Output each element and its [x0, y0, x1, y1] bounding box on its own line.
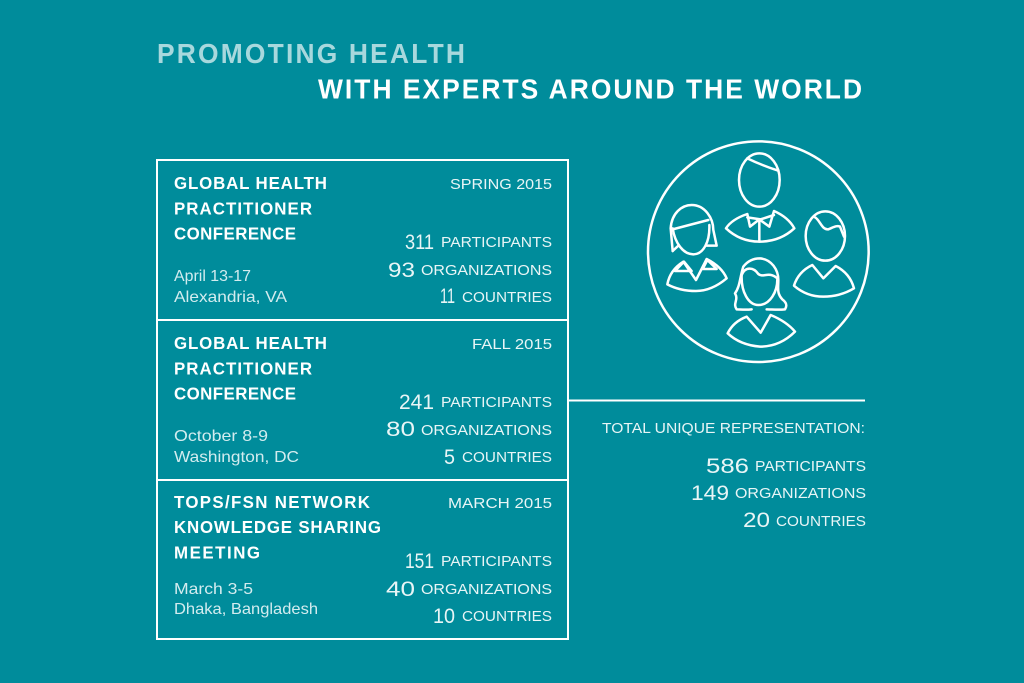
- panel: spring 2015 conference: ORGANIZATIONS: [421, 262, 552, 279]
- panel: march 2015 meeting: ORGANIZATIONS: [421, 581, 552, 598]
- panel: spring 2015 conference: PRACTITIONER: [174, 198, 313, 219]
- panel: march 2015 meeting: Dhaka, Bangladesh: [174, 601, 318, 618]
- panel: march 2015 meeting: TOPS/FSN NETWORK: [174, 492, 371, 512]
- panel: spring 2015 conference: [157, 160, 568, 320]
- panel: fall 2015 conference: ORGANIZATIONS: [421, 422, 552, 439]
- icon: man top: [726, 153, 794, 242]
- icon: woman bottom: [728, 258, 795, 347]
- panel: fall 2015 conference: Washington, DC: [174, 449, 299, 466]
- panel: spring 2015 conference: April 13-17: [174, 268, 251, 285]
- panel: march 2015 meeting: KNOWLEDGE SHARING: [174, 517, 381, 537]
- icon: group of people in circle: [648, 141, 869, 362]
- total unique representation stats: ORGANIZATIONS: [735, 485, 866, 502]
- panel: march 2015 meeting: MEETING: [174, 542, 260, 563]
- panel: fall 2015 conference: COUNTRIES: [462, 449, 552, 466]
- panel: spring 2015 conference: CONFERENCE: [174, 223, 296, 244]
- panel: fall 2015 conference: [157, 320, 568, 480]
- panel: spring 2015 conference: Alexandria, VA: [174, 289, 287, 306]
- panel: spring 2015 conference: 11: [440, 285, 455, 308]
- panel: march 2015 meeting: [157, 480, 568, 639]
- panel: fall 2015 conference: 241: [399, 391, 434, 414]
- panel: fall 2015 conference: CONFERENCE: [174, 383, 296, 404]
- panel: fall 2015 conference: PARTICIPANTS: [441, 394, 552, 411]
- title: PROMOTING HEALTH: [157, 39, 465, 69]
- panel: march 2015 meeting: 151: [405, 550, 434, 573]
- connector line: [568, 400, 865, 402]
- total unique representation stats: [602, 420, 866, 532]
- panel: spring 2015 conference: PARTICIPANTS: [441, 234, 552, 251]
- panel: spring 2015 conference: SPRING 2015: [450, 176, 552, 193]
- total unique representation stats: COUNTRIES: [776, 513, 866, 530]
- icon: man right: [794, 211, 854, 297]
- panel: fall 2015 conference: October 8-9: [174, 428, 268, 445]
- total unique representation stats: 20: [743, 509, 770, 532]
- panel: march 2015 meeting: March 3-5: [174, 581, 253, 598]
- panel: spring 2015 conference: GLOBAL HEALTH: [174, 173, 327, 193]
- panel: fall 2015 conference: 5: [444, 446, 455, 469]
- panel: spring 2015 conference: 311: [405, 231, 434, 254]
- total unique representation stats: 149: [691, 482, 729, 505]
- panel: march 2015 meeting: COUNTRIES: [462, 608, 552, 625]
- panel: spring 2015 conference: COUNTRIES: [462, 289, 552, 306]
- panel: fall 2015 conference: 80: [386, 418, 415, 441]
- panel: spring 2015 conference: 93: [388, 259, 415, 282]
- panel: march 2015 meeting: MARCH 2015: [448, 495, 552, 512]
- panel: fall 2015 conference: GLOBAL HEALTH: [174, 333, 327, 353]
- icon: woman left: [667, 205, 727, 291]
- panel: march 2015 meeting: 10: [433, 605, 455, 628]
- total unique representation stats: TOTAL UNIQUE REPRESENTATION:: [602, 420, 865, 437]
- panel: march 2015 meeting: 40: [386, 578, 415, 601]
- title: [157, 39, 862, 105]
- title: WITH EXPERTS AROUND THE WORLD: [318, 74, 862, 105]
- panel: fall 2015 conference: PRACTITIONER: [174, 358, 313, 379]
- panel: march 2015 meeting: PARTICIPANTS: [441, 553, 552, 570]
- panel: fall 2015 conference: FALL 2015: [472, 336, 552, 353]
- total unique representation stats: PARTICIPANTS: [755, 458, 866, 475]
- total unique representation stats: 586: [706, 455, 749, 478]
